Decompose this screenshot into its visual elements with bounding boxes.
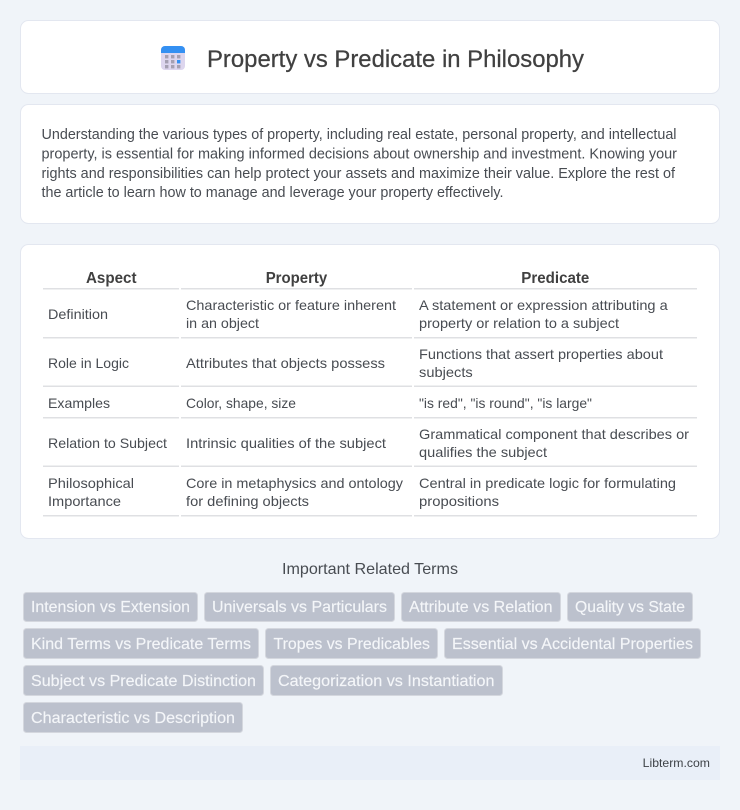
tag bbox=[266, 628, 438, 658]
heading: important related terms: Important Related Terms bbox=[282, 561, 458, 578]
tag bbox=[444, 628, 700, 658]
intro paragraph: rights and responsibilities can help protect your assets and maximize their value. Explore the rest of bbox=[42, 166, 676, 182]
table header row: Property bbox=[266, 270, 327, 287]
table row: examples: Color, shape, size bbox=[186, 395, 296, 411]
table row: relation to subject: Relation to Subject bbox=[48, 435, 167, 451]
table row: philosophical importance: propositions bbox=[419, 493, 499, 509]
table header row: Aspect bbox=[86, 270, 137, 287]
intro paragraph: Understanding the various types of property, including real estate, personal property, and intellectual bbox=[42, 127, 676, 143]
intro paragraph: the article to learn how to manage and leverage your property effectively. bbox=[42, 185, 504, 201]
table row: philosophical importance bbox=[43, 475, 697, 516]
table row: role in logic: Role in Logic bbox=[48, 355, 129, 371]
table row: role in logic bbox=[43, 346, 697, 387]
tag: Universals vs Particulars bbox=[212, 599, 387, 616]
table row: role in logic: Attributes that objects possess bbox=[186, 355, 385, 371]
table row: definition: in an object bbox=[186, 315, 259, 331]
tag bbox=[568, 592, 692, 622]
table row: relation to subject bbox=[43, 426, 697, 467]
tag: Kind Terms vs Predicate Terms bbox=[31, 636, 251, 653]
tag: Tropes vs Predicables bbox=[274, 636, 430, 653]
tag bbox=[270, 666, 502, 696]
tag bbox=[402, 592, 560, 622]
tag bbox=[24, 702, 242, 732]
table row: philosophical importance: for defining objects bbox=[186, 493, 309, 509]
intro paragraph bbox=[42, 127, 677, 201]
panel: introduction bbox=[20, 104, 720, 224]
tag bbox=[24, 628, 258, 658]
footer bbox=[20, 746, 720, 780]
tag: Subject vs Predicate Distinction bbox=[31, 673, 256, 690]
table header row bbox=[43, 270, 697, 290]
tag: Categorization vs Instantiation bbox=[278, 673, 494, 690]
table row: definition: property or relation to a subject bbox=[419, 315, 619, 331]
tag bbox=[204, 592, 394, 622]
table row: examples: "is red", "is round", "is large" bbox=[419, 395, 592, 411]
table row: examples: Examples bbox=[48, 395, 110, 411]
tags: related terms bbox=[24, 592, 700, 732]
tag: Quality vs State bbox=[575, 599, 685, 616]
table row: philosophical importance: Core in metaphysics and ontology bbox=[186, 475, 403, 491]
tag bbox=[24, 666, 264, 696]
tag: Characteristic vs Description bbox=[31, 710, 235, 727]
table row: role in logic: subjects bbox=[419, 364, 473, 380]
title: Property vs Predicate in Philosophy bbox=[207, 46, 584, 73]
footer source: Libterm.com bbox=[643, 756, 710, 770]
tag bbox=[24, 592, 198, 622]
table header row: Predicate bbox=[521, 270, 589, 287]
table row: relation to subject: Intrinsic qualities of the subject bbox=[186, 435, 386, 451]
table row: relation to subject: Grammatical component that describes or bbox=[419, 426, 689, 442]
tag: Essential vs Accidental Properties bbox=[452, 636, 693, 653]
table row: philosophical importance: Importance bbox=[48, 493, 121, 509]
panel: header bbox=[20, 20, 720, 94]
table row: philosophical importance: Central in predicate logic for formulating bbox=[419, 475, 676, 491]
tag: Intension vs Extension bbox=[31, 599, 190, 616]
table row: role in logic: Functions that assert properties about bbox=[419, 346, 663, 362]
table row: definition: A statement or expression attributing a bbox=[419, 297, 668, 313]
table row: definition: Characteristic or feature inherent bbox=[186, 297, 396, 313]
table row: relation to subject: qualifies the subject bbox=[419, 444, 547, 460]
table row: definition: Definition bbox=[48, 306, 108, 322]
tag: Attribute vs Relation bbox=[409, 599, 552, 616]
intro paragraph: property, is essential for making informed decisions about ownership and investment. Knowing your bbox=[42, 146, 677, 162]
table row: definition bbox=[43, 297, 697, 338]
table row: philosophical importance: Philosophical bbox=[48, 475, 134, 491]
panel: comparison table bbox=[20, 244, 720, 538]
table row: examples bbox=[43, 395, 697, 418]
icon: calendar bbox=[161, 46, 185, 70]
